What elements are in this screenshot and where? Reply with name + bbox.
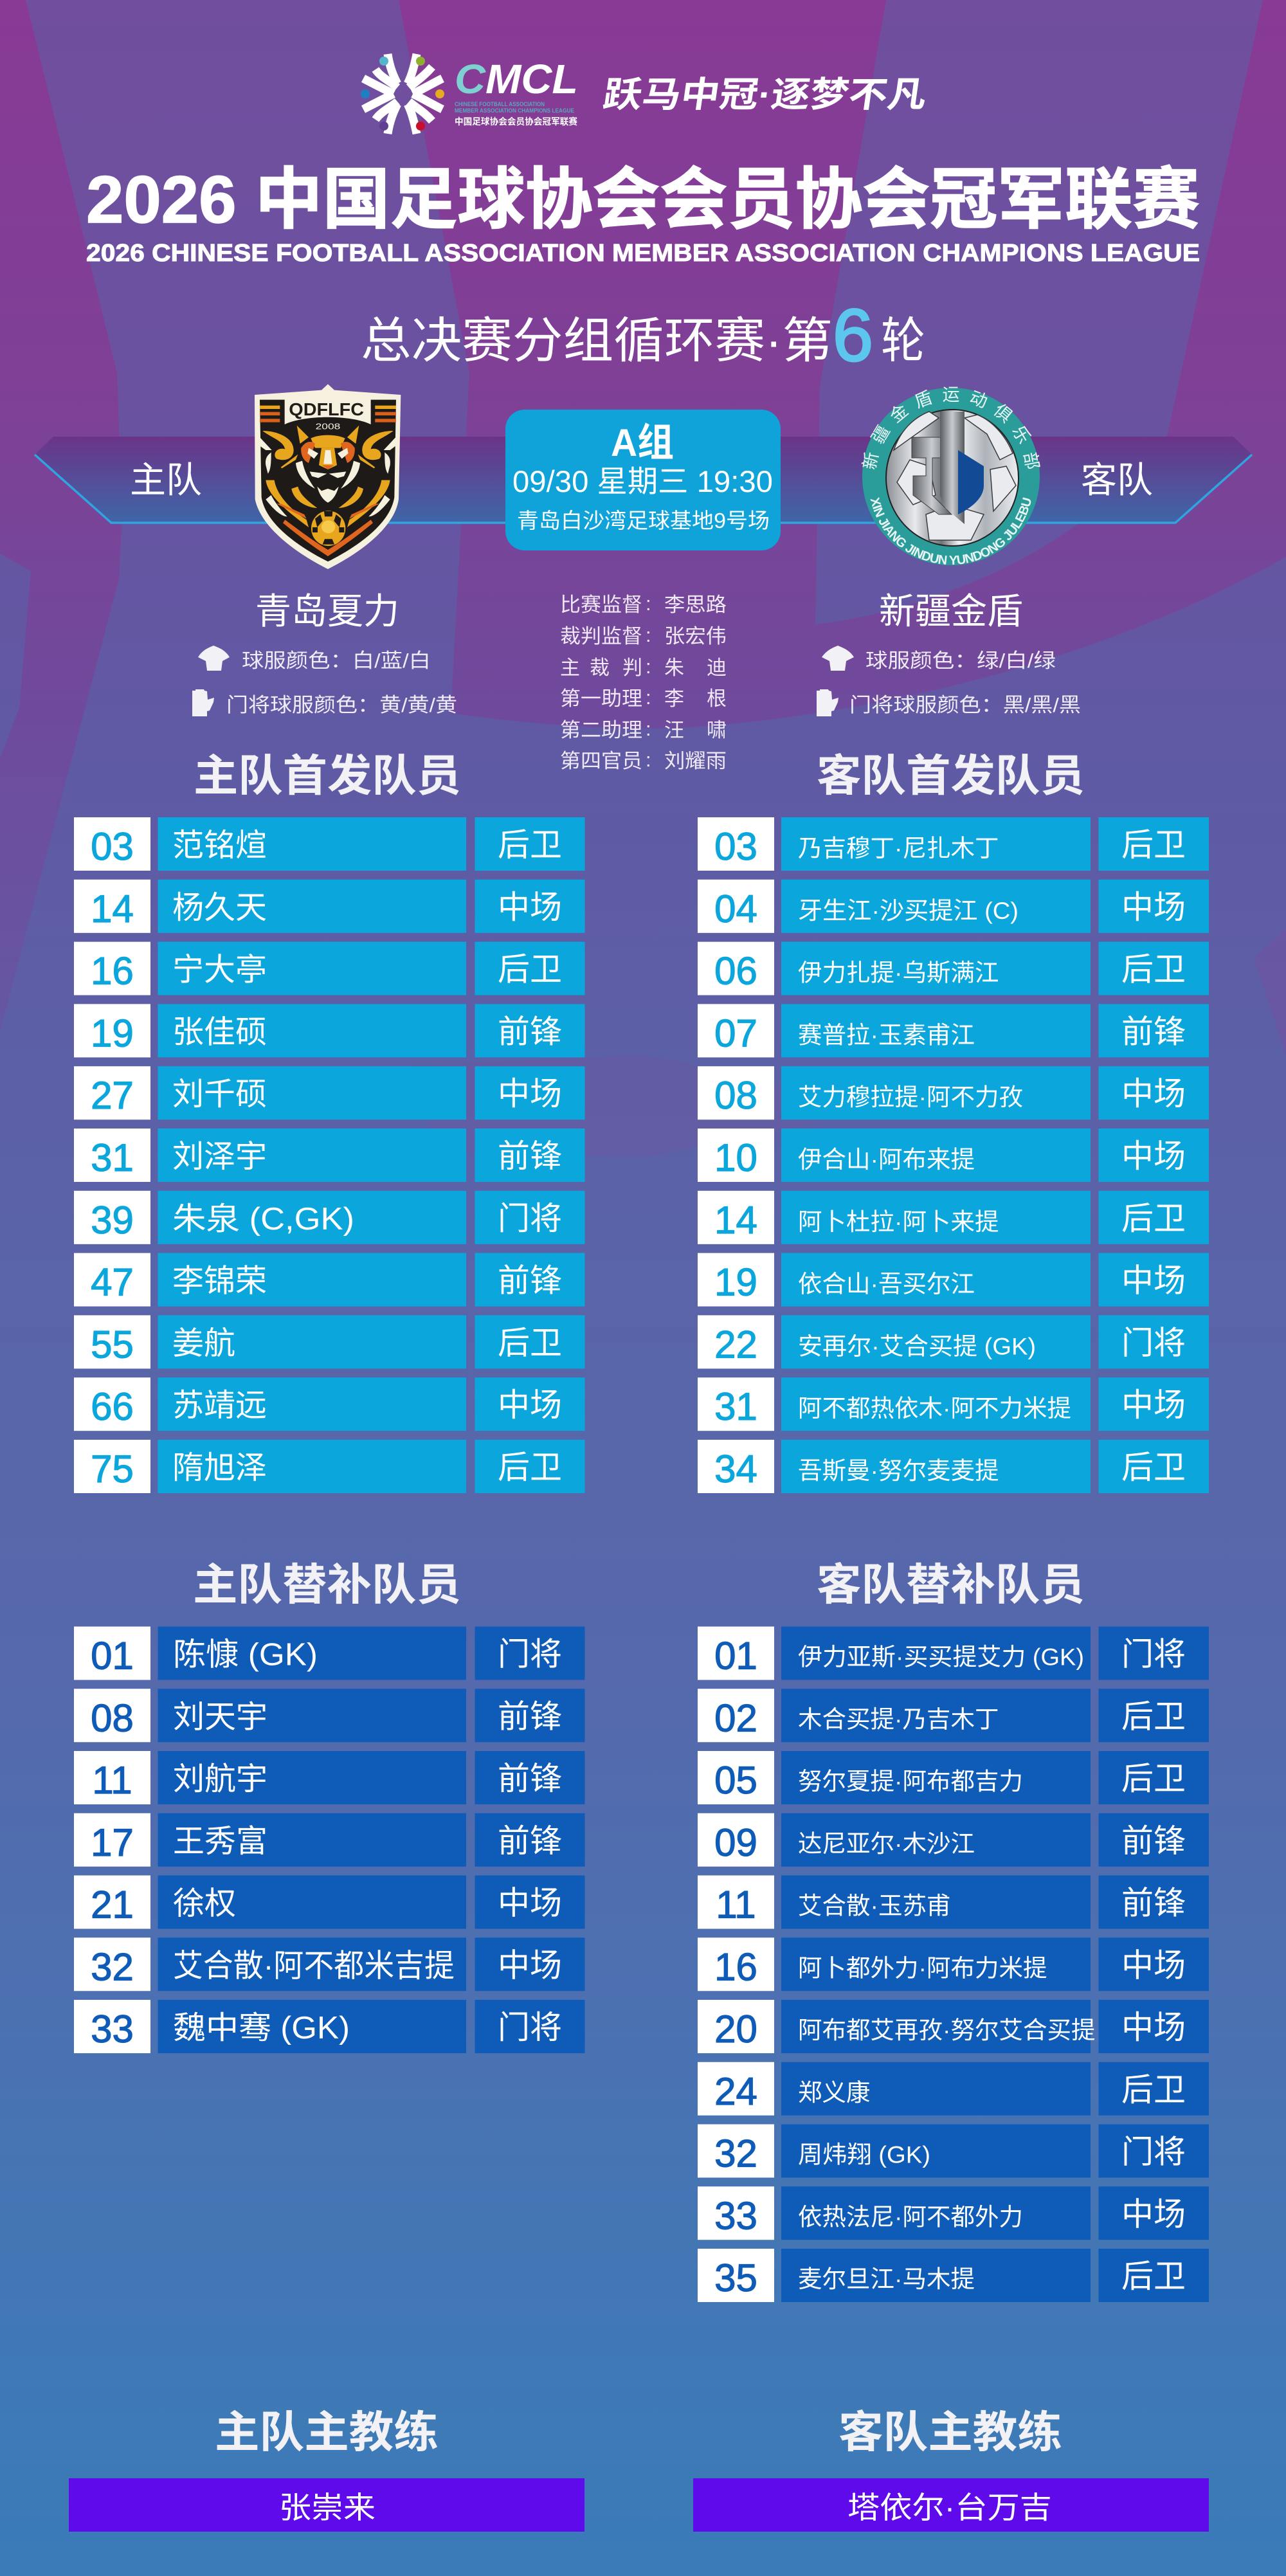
panel: away starters: 后卫 [1121,827,1186,863]
panel: home starters: 中场 [498,889,562,925]
officials list: 朱迪 [664,657,727,679]
panel: away substitutes: 后卫 [1121,2072,1186,2108]
panel: home starters: 杨久天 [172,891,267,925]
away team name: 新疆金盾 [879,591,1023,631]
panel: home starters: 张佳硕 [172,1015,267,1049]
icon: CMCL flower emblem [363,54,442,134]
panel: home substitutes: 中场 [498,1885,562,1921]
panel: home starters: 19 [91,1011,134,1055]
panel: home starters: 刘泽宇 [172,1139,267,1174]
panel: away substitutes: 艾合散·玉苏甫 [798,1892,950,1919]
panel: home starters: 前锋 [498,1013,562,1049]
panel: home substitutes: 32 [91,1945,134,1988]
panel: away substitutes: 后卫 [1121,1761,1186,1797]
panel: away starters: 08 [714,1074,757,1117]
venue: 青岛白沙湾足球基地9号场 [517,509,770,532]
panel: home starters: 39 [91,1199,134,1242]
home shirt colours: 球服颜色：白/蓝/白 [242,649,431,672]
officials list: : [646,686,651,709]
icon: away shirt [822,646,854,671]
panel: home starters: 刘千硕 [172,1077,267,1112]
panel: away substitutes: 32 [714,2132,757,2175]
panel: away substitutes: 门将 [1121,1636,1186,1672]
panel: home starters: 47 [91,1261,134,1304]
panel: home substitutes: 08 [91,1696,134,1739]
panel: away starters: 中场 [1121,1076,1186,1112]
round heading: 总决赛分组循环赛·第 [361,314,833,368]
officials list: 李思路 [664,594,727,616]
officials list: 第二助理 [560,719,642,741]
panel: away substitutes: 郑义康 [798,2079,871,2106]
panel: home starters: 03 [91,825,134,868]
officials list: 第四官员 [560,750,642,772]
panel: home starters: 后卫 [498,827,562,863]
panel: away substitutes: 阿布都艾再孜·努尔艾合买提 [798,2017,1096,2044]
panel: away starters: 后卫 [1121,1201,1186,1237]
panel: home starters: 宁大亭 [172,953,267,988]
logo chinese caption: 中国足球协会会员协会冠军联赛 [455,116,577,127]
panel: away substitutes: 01 [714,1635,757,1677]
officials list: 第一助理 [560,687,642,710]
banner: home: 主队 [130,460,202,500]
panel: away starters: 阿卜杜拉·阿卜来提 [798,1208,999,1235]
panel: away coach name [693,2478,1209,2532]
panel: away substitutes: 前锋 [1121,1823,1186,1859]
officials list: 李根 [664,687,727,710]
officials list: 主裁判 [560,657,642,679]
panel: home substitutes: 11 [92,1759,132,1802]
panel: home substitutes: 门将 [498,2009,562,2045]
panel: away substitutes: 35 [714,2256,757,2299]
panel: away starters: 牙生江·沙买提江 (C) [798,897,1019,924]
officials list: 张宏伟 [664,625,727,648]
officials list: 裁判监督 [560,625,642,648]
panel: home coach name [69,2478,584,2532]
panel: home substitutes: 王秀富 [173,1824,267,1859]
panel: away starters: 伊合山·阿布来提 [798,1146,975,1173]
icon: away crest [862,386,1040,565]
panel: home starters: 16 [91,950,134,993]
panel: away substitutes: 16 [714,1945,757,1988]
panel: away substitutes: 中场 [1121,2196,1186,2232]
date and time: 09/30 星期三 19:30 [512,464,773,498]
panel: home substitutes: 前锋 [498,1698,562,1734]
panel: away starters: 后卫 [1121,952,1186,988]
panel: away substitutes: 门将 [1121,2134,1186,2170]
panel: home starters: 前锋 [498,1138,562,1174]
officials list: : [646,718,651,740]
panel: home starters: 后卫 [498,1325,562,1361]
heading: away substitutes: 客队替补队员 [817,1561,1085,1610]
panel: home substitutes: 前锋 [498,1761,562,1797]
panel: away starters: 吾斯曼·努尔麦麦提 [798,1457,999,1484]
logo: CMCL [361,54,578,134]
panel: away substitutes: 阿卜都外力·阿布力米提 [798,1954,1047,1981]
panel: home starters [74,817,585,1493]
panel: home starters: 朱泉 (C,GK) [172,1202,354,1237]
heading: home starters: 主队首发队员 [194,752,461,801]
panel: away substitutes: 20 [714,2008,757,2051]
panel: home starters: 前锋 [498,1263,562,1299]
panel: home substitutes [74,1627,585,2053]
heading: home substitutes: 主队替补队员 [193,1561,461,1610]
panel: away starters: 06 [714,950,757,993]
panel: away starters: 19 [714,1261,757,1304]
panel: away substitutes: 中场 [1121,2009,1186,2045]
panel: away starters: 中场 [1121,1387,1186,1423]
group name: A组 [611,421,674,464]
officials list: 刘耀雨 [664,750,727,772]
icon: home crest: 2008 [316,421,340,431]
icon: home crest: QDFLFC [289,399,364,419]
panel: away substitutes: 中场 [1121,1947,1186,1983]
ring text chinese: 新疆金盾运动俱乐部 [862,386,1040,469]
panel: home substitutes: 魏中骞 (GK) [173,2011,350,2045]
logo english caption: CHINESE FOOTBALL ASSOCIATION [455,101,545,108]
panel: away starters: 03 [714,825,757,868]
panel: away starters: 乃吉穆丁·尼扎木丁 [798,835,999,862]
home goalkeeper colours: 门将球服颜色：黄/黄/黄 [226,694,457,716]
panel: home substitutes: 17 [91,1821,134,1864]
banner: away: 客队 [1081,460,1153,500]
icon: home glove [192,689,214,716]
panel: away substitutes: 麦尔旦江·马木提 [798,2265,975,2292]
officials list [560,592,727,772]
banner: away [772,437,1252,523]
panel: home starters: 李锦荣 [172,1264,267,1299]
slogan: 跃马中冠·逐梦不凡 [601,75,929,114]
panel: away starters: 安再尔·艾合买提 (GK) [798,1332,1036,1359]
officials list: : [646,655,651,678]
panel: home substitutes: 陈慷 (GK) [173,1637,318,1672]
panel: home starters: 后卫 [498,1449,562,1485]
panel: away starters: 门将 [1121,1325,1186,1361]
panel: away substitutes: 33 [714,2194,757,2237]
panel: away starters: 14 [714,1199,757,1242]
panel: away substitutes: 努尔夏提·阿布都吉力 [798,1768,1023,1795]
panel: away starters: 赛普拉·玉素甫江 [798,1021,975,1048]
panel: away substitutes: 09 [714,1821,757,1864]
panel: away starters: 31 [714,1385,757,1428]
panel: home coach name: 张崇来 [279,2490,376,2525]
panel: home starters: 苏靖远 [172,1388,267,1423]
panel: home substitutes: 前锋 [498,1823,562,1859]
panel: home starters: 75 [91,1447,134,1491]
panel: away substitutes: 02 [714,1696,757,1739]
panel: home starters: 中场 [498,1076,562,1112]
panel: away coach name: 塔依尔·台万吉 [847,2490,1052,2525]
subtitle english: 2026 CHINESE FOOTBALL ASSOCIATION MEMBER ASSOCIATION CHAMPIONS LEAGUE [86,240,1200,267]
icon: home crest [255,384,401,569]
panel: home substitutes: 艾合散·阿不都米吉提 [173,1948,455,1983]
panel: home substitutes: 33 [91,2008,134,2051]
panel: home starters: 27 [91,1074,134,1117]
panel: home substitutes: 刘天宇 [173,1700,267,1734]
panel: away starters: 34 [714,1447,757,1491]
officials list: : [646,624,651,646]
away shirt colours: 球服颜色：绿/白/绿 [865,649,1056,672]
icon: away glove [817,689,838,716]
panel: away substitutes: 后卫 [1121,1698,1186,1734]
panel: home starters: 66 [91,1385,134,1428]
panel: home substitutes: 21 [91,1883,134,1927]
panel: home substitutes: 徐权 [173,1887,236,1921]
heading: home head coach: 主队主教练 [215,2408,439,2457]
panel: away substitutes [698,1627,1209,2302]
panel: home starters: 14 [91,887,134,930]
panel: home substitutes: 刘航宇 [173,1762,267,1797]
center match card [505,410,781,550]
officials list: 比赛监督 [560,594,642,616]
panel: away substitutes: 周炜翔 (GK) [798,2141,930,2168]
panel: home substitutes: 01 [91,1635,134,1677]
panel: away starters [698,817,1209,1493]
panel: home starters: 31 [91,1136,134,1179]
panel: away starters: 22 [714,1323,757,1366]
icon: home shirt [198,646,230,671]
round heading: 6 [833,295,873,377]
banner: home [35,437,514,523]
panel: away starters: 中场 [1121,889,1186,925]
panel: home substitutes: 中场 [498,1947,562,1983]
round heading [361,295,925,377]
panel: home starters: 姜航 [172,1326,235,1361]
panel: away substitutes: 依热法尼·阿不都外力 [798,2203,1023,2230]
panel: away starters: 依合山·吾买尔江 [798,1271,975,1298]
panel: away starters: 阿不都热依木·阿不力米提 [798,1395,1071,1422]
panel: away starters: 后卫 [1121,1449,1186,1485]
round heading: 轮 [881,314,925,368]
officials list: : [646,592,651,615]
panel: away starters: 中场 [1121,1138,1186,1174]
panel: home starters: 隋旭泽 [172,1451,267,1485]
officials list: : [646,748,651,771]
panel: home starters: 范铭煊 [172,828,267,863]
panel: away substitutes: 05 [714,1759,757,1802]
panel: away starters: 中场 [1121,1263,1186,1299]
heading: away starters: 客队首发队员 [817,752,1085,801]
home team name: 青岛夏力 [255,591,399,631]
panel: away substitutes: 木合买提·乃吉木丁 [798,1705,999,1732]
panel: home starters: 后卫 [498,952,562,988]
panel: away starters: 07 [714,1011,757,1055]
panel: home substitutes: 门将 [498,1636,562,1672]
heading: away head coach: 客队主教练 [838,2408,1062,2457]
officials list: 汪啸 [664,719,727,741]
icon: emblem dots [361,57,444,131]
panel: home starters: 中场 [498,1387,562,1423]
logo english caption line 2: MEMBER ASSOCIATION CHAMPIONS LEAGUE [455,107,574,114]
panel: away substitutes: 达尼亚尔·木沙江 [798,1830,975,1857]
panel: away starters: 04 [714,887,757,930]
away goalkeeper colours: 门将球服颜色：黑/黑/黑 [849,694,1081,716]
panel: away substitutes: 前锋 [1121,1885,1186,1921]
panel: away substitutes: 伊力亚斯·买买提艾力 (GK) [798,1644,1084,1671]
panel: home starters: 门将 [498,1201,562,1237]
panel: home starters: 55 [91,1323,134,1366]
panel: away starters: 前锋 [1121,1013,1186,1049]
title: 2026 中国足球协会会员协会冠军联赛 [86,163,1200,237]
logo wordmark: CMCL [455,56,578,102]
panel: away substitutes: 24 [714,2070,757,2113]
ring text latin: XIN JIANG JINDUN YUNDONG JULEBU [871,496,1031,565]
panel: away starters: 伊力扎提·乌斯满江 [798,959,999,986]
panel: away starters: 艾力穆拉提·阿不力孜 [798,1084,1023,1111]
panel: away substitutes: 11 [716,1883,756,1927]
panel: away substitutes: 后卫 [1121,2258,1186,2294]
panel: away starters: 10 [714,1136,757,1179]
